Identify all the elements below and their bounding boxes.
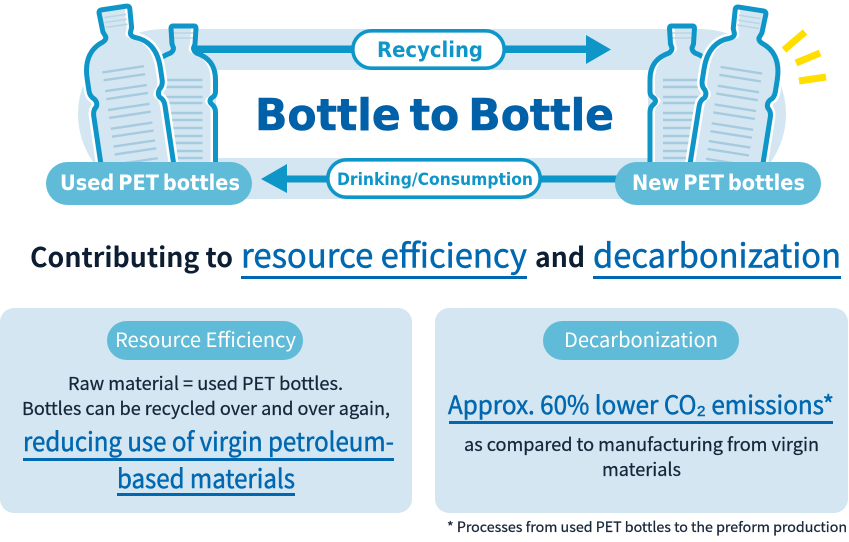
panel heading pill <box>107 321 303 360</box>
arrow: drinking / consumption <box>261 164 640 193</box>
panel background <box>0 308 412 513</box>
body text: materials <box>602 456 681 482</box>
icon: yellow shine rays <box>784 32 826 81</box>
body text: Raw material = used PET bottles. <box>68 370 343 396</box>
label: used PET bottles <box>46 162 252 205</box>
icon: new small bottle <box>648 24 703 162</box>
highlighted claim: reducing use of virgin petroleum- <box>23 422 394 459</box>
diagram title: Bottle to Bottle <box>255 90 614 141</box>
panel heading pill: Resource Efficiency <box>115 324 297 353</box>
icon: used small bottle <box>162 24 218 162</box>
heading text: contributing to: Contributing to <box>30 236 233 275</box>
highlighted claim: Approx. 60% lower CO₂ emissions* <box>448 386 834 422</box>
footnote: * Processes from used PET bottles to the preform production <box>447 517 847 537</box>
label: new PET bottles <box>615 162 821 205</box>
highlighted claim <box>23 422 394 496</box>
label: drinking / consumption <box>328 160 540 197</box>
body text: Bottles can be recycled over and over again, <box>22 395 390 421</box>
label: recycling <box>353 31 504 68</box>
label: new PET bottles: New PET bottles <box>632 171 805 195</box>
panel heading pill: Decarbonization <box>564 324 718 353</box>
body text: as compared to manufacturing from virgin <box>464 431 819 457</box>
heading highlight: resource efficiency: resource efficiency <box>241 230 527 278</box>
heading <box>30 230 841 279</box>
label: used PET bottles: Used PET bottles <box>60 171 240 195</box>
panel background <box>435 308 848 513</box>
panel heading pill <box>543 321 739 360</box>
highlighted claim: based materials <box>117 459 295 496</box>
icon: new large bottle <box>685 4 782 162</box>
arrow: recycling <box>195 35 611 64</box>
label: recycling: Recycling <box>377 38 483 62</box>
panel: resource efficiency <box>0 308 412 513</box>
heading text: and: and <box>535 236 585 275</box>
icon: used large bottle <box>83 4 178 162</box>
panel: decarbonization <box>435 308 848 513</box>
body text <box>22 370 390 421</box>
background band <box>78 29 786 199</box>
diagram: bottle to bottle cycle <box>46 3 826 205</box>
body text <box>464 431 819 482</box>
label: drinking / consumption: Drinking/Consumption <box>337 170 533 190</box>
heading highlight: decarbonization: decarbonization <box>593 230 841 278</box>
